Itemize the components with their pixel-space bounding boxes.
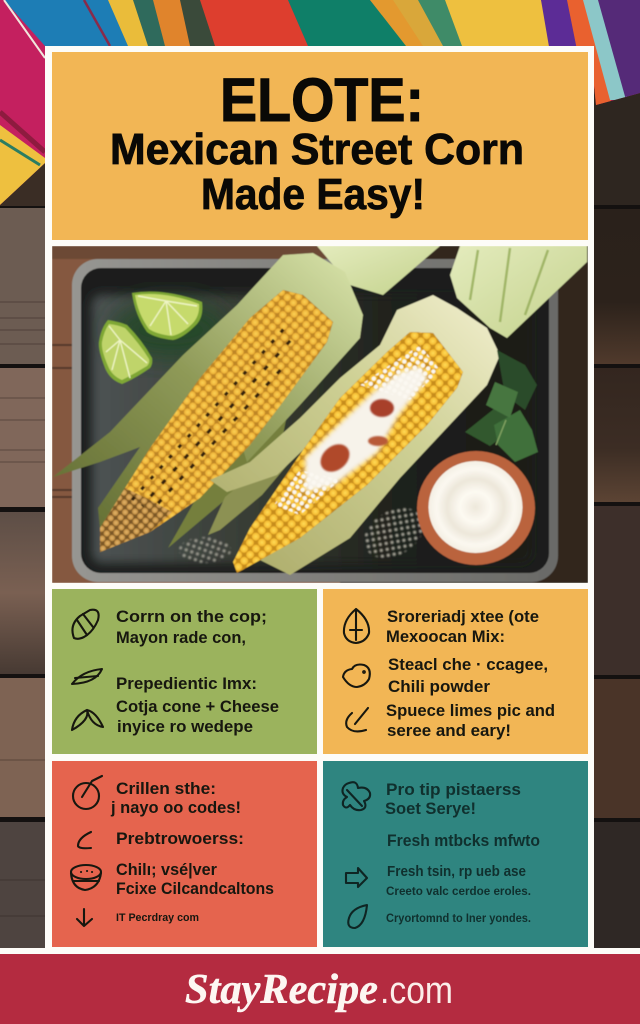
icon: pod bbox=[348, 905, 367, 928]
title line: Made Easy: Made Easy! bbox=[201, 170, 425, 219]
brand name: StayRecipe bbox=[185, 967, 378, 1013]
icon: herb bbox=[342, 782, 370, 810]
text: fresh: Fresh mtbcks mfwto bbox=[387, 832, 540, 850]
text: mayo line: Mayon rade con, bbox=[116, 629, 246, 647]
icon: check bbox=[346, 708, 368, 731]
cilantro bbox=[465, 350, 538, 462]
husk of topped corn bbox=[210, 295, 500, 575]
icon: arrow bbox=[346, 868, 367, 887]
serape cloth bbox=[0, 0, 640, 210]
title line: ELOTE: ELOTE: bbox=[220, 66, 424, 134]
text: wedge line: inyice ro wedepe bbox=[117, 718, 253, 736]
icon: sprout leaves bbox=[72, 710, 103, 730]
white frame bbox=[45, 46, 594, 950]
icon: curve bbox=[78, 832, 91, 848]
text: serve: Soet Serye! bbox=[385, 800, 476, 818]
tuft of first corn bbox=[317, 246, 440, 295]
icon: bowl bbox=[71, 865, 101, 890]
text: serve: seree and eary! bbox=[387, 722, 511, 740]
icon: grilled round bbox=[73, 776, 102, 809]
lower husk leaves bbox=[168, 420, 286, 548]
grilled corn cob bbox=[100, 290, 333, 552]
text: squeeze lime: Spuece limes pic and bbox=[386, 702, 555, 720]
title line: Mexican Street Corn: Mexican Street Corn bbox=[110, 125, 524, 174]
title panel bbox=[52, 52, 588, 240]
husk of grilled corn bbox=[53, 253, 363, 528]
text: mexican mix: Mexoocan Mix: bbox=[386, 628, 505, 646]
panel: green ingredients bbox=[52, 589, 317, 754]
text: chili silver: Chilı; ᴠsé|ver bbox=[116, 861, 218, 879]
icon: corn bbox=[72, 610, 99, 639]
panel: red grilling bbox=[52, 761, 317, 947]
text: grilled: Crillen sthe: bbox=[116, 780, 216, 798]
tray bbox=[72, 259, 558, 582]
topped corn cob bbox=[233, 332, 463, 573]
text: pro tip: Pro tip pistaerss bbox=[386, 781, 521, 799]
panel: orange mix bbox=[323, 589, 588, 754]
mayo dip bowl bbox=[417, 451, 535, 565]
photo: grilled corn on a tray bbox=[52, 246, 588, 583]
text: cilantro: Fcixe Cilcandcaltons bbox=[116, 880, 274, 898]
lime wedges bbox=[99, 292, 202, 384]
white band above footer bbox=[0, 948, 640, 954]
icon: cheese blob bbox=[343, 664, 370, 687]
text: customize: Cryortomnd to Iner yondes. bbox=[386, 911, 531, 925]
tuft of second corn bbox=[450, 246, 587, 338]
text: fresh tip: Fresh tsin, rp ueb ase bbox=[387, 863, 526, 880]
icon: seed bbox=[344, 609, 369, 643]
text: prep heading: Prebtrowoerss: bbox=[116, 830, 244, 848]
text: cotija: Cotja cone + Cheese bbox=[116, 698, 279, 716]
text: chili powder: Chili powder bbox=[388, 678, 491, 696]
salt speckles bbox=[178, 507, 423, 564]
text: small note: IT Pecrdray com bbox=[116, 912, 199, 924]
footer band bbox=[0, 954, 640, 1024]
text: create: Creeto valc cerdoe eroles. bbox=[386, 884, 531, 898]
text: ingredient heading: Prepedientic Imx: bbox=[116, 675, 257, 693]
cotija and chili topping bbox=[274, 345, 440, 515]
text: corn on the cob: Corrn on the cop; bbox=[116, 608, 267, 626]
text: cheese line: Steacl che · ccagee, bbox=[388, 656, 548, 674]
icon: leaf bbox=[72, 669, 102, 684]
text: spread line: Sroreriadj xtee (ote bbox=[387, 608, 539, 626]
panel: teal pro tips bbox=[323, 761, 588, 947]
brand domain: .com bbox=[380, 970, 453, 1012]
text: mayo codes: j nayo oo codes! bbox=[110, 799, 241, 817]
icon: down arrow bbox=[77, 909, 92, 926]
